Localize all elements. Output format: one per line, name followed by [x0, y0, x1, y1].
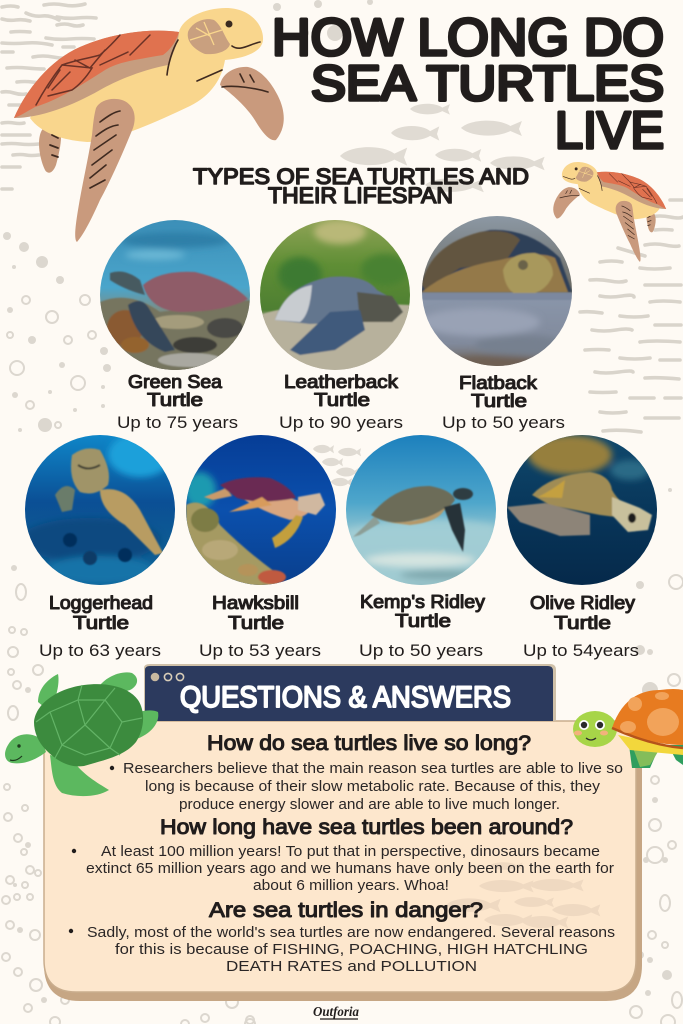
- header tab: [145, 666, 553, 721]
- question 3 heading: Are sea turtles in danger?: [209, 899, 483, 922]
- title: HOW LONG DO: [272, 9, 664, 67]
- name: loggerhead turtle: Loggerhead: [49, 593, 153, 613]
- icon: cartoon turtle: [573, 689, 683, 768]
- name: olive ridley turtle: Turtle: [554, 613, 611, 633]
- name: kemp's ridley turtle: [360, 592, 485, 631]
- card: leatherback turtle: [260, 220, 410, 432]
- answer 1: Researchers believe that the main reason sea turtles are able to live so: [123, 760, 623, 777]
- lifespan: 63 years: Up to 63 years: [39, 641, 161, 660]
- name: green sea turtle: Green Sea: [128, 372, 223, 392]
- panel body: [44, 721, 636, 992]
- photo: kemp's ridley turtle: [346, 435, 496, 585]
- name: hawksbill turtle: Hawksbill: [212, 593, 299, 613]
- answer 3: for this is because of FISHING, POACHING, HIGH HATCHLING: [115, 941, 588, 958]
- card: green sea turtle: [95, 220, 255, 432]
- photo: hawksbill turtle: [184, 435, 336, 590]
- lifespan: 54 years: Up to 54years: [523, 641, 639, 660]
- name: flatback turtle: [459, 373, 538, 411]
- answer 2: about 6 million years. Whoa!: [253, 877, 449, 894]
- icon: green turtle: [5, 672, 158, 796]
- name: hawksbill turtle: [212, 593, 299, 633]
- name: flatback turtle: Turtle: [471, 391, 527, 411]
- name: green sea turtle: Turtle: [147, 390, 203, 410]
- name: loggerhead turtle: Turtle: [73, 613, 129, 633]
- answer 1: produce energy slower and are able to live much longer.: [179, 796, 560, 813]
- large illustrated sea turtle: [14, 8, 284, 242]
- name: olive ridley turtle: [530, 593, 635, 633]
- title: LIVE: [555, 102, 664, 160]
- title: [272, 9, 664, 160]
- lifespan: 50 years: Up to 50 years: [442, 413, 565, 432]
- answer 3: [69, 924, 615, 975]
- name: leatherback turtle: Turtle: [314, 390, 370, 410]
- answer 1: long is because of their slow metabolic rate. Because of this, they: [145, 778, 601, 795]
- answer 2: extinct 65 million years ago and we humans have only been on the earth for: [86, 860, 614, 877]
- photo: flatback turtle: [420, 216, 572, 370]
- name: hawksbill turtle: Turtle: [228, 613, 284, 633]
- question 1 heading: How do sea turtles live so long?: [207, 732, 531, 755]
- header tab shadow: [144, 664, 556, 721]
- lifespan: 75 years: Up to 75 years: [117, 413, 238, 432]
- lifespan: 53 years: Up to 53 years: [199, 641, 321, 660]
- card: loggerhead turtle: [20, 433, 175, 660]
- name: kemp's ridley turtle: Turtle: [395, 611, 451, 631]
- name: green sea turtle: [128, 372, 223, 410]
- panel shadow: [44, 730, 642, 1001]
- window dots: [151, 673, 184, 681]
- card: kemp's ridley turtle: [346, 435, 496, 660]
- answer 3: DEATH RATES and POLLUTION: [226, 958, 477, 975]
- card: olive ridley turtle: [507, 435, 657, 660]
- name: loggerhead turtle: [49, 593, 153, 633]
- name: leatherback turtle: [284, 372, 399, 410]
- lifespan: 50 years: Up to 50 years: [359, 641, 483, 660]
- photo: olive ridley turtle: [507, 435, 657, 585]
- name: flatback turtle: Flatback: [459, 373, 538, 393]
- answer 2: At least 100 million years! To put that in perspective, dinosaurs became: [101, 843, 600, 860]
- question 2 heading: How long have sea turtles been around?: [160, 816, 573, 839]
- panel fish: [446, 862, 600, 928]
- card: flatback turtle: [420, 216, 572, 432]
- photo: loggerhead turtle: [20, 433, 175, 585]
- card: hawksbill turtle: [184, 435, 336, 660]
- subtitle: TYPES OF SEA TURTLES AND: [193, 164, 529, 189]
- small illustrated sea turtle: [553, 162, 666, 262]
- name: olive ridley turtle: Olive Ridley: [530, 593, 635, 613]
- subtitle: THEIR LIFESPAN: [268, 183, 453, 208]
- fish school background: [313, 104, 545, 486]
- answer 3: Sadly, most of the world's sea turtles are now endangered. Several reasons: [87, 924, 615, 941]
- title: SEA TURTLES: [311, 57, 664, 111]
- answer 1: [110, 760, 623, 813]
- photo: leatherback turtle: [260, 220, 410, 370]
- photo: green sea turtle: [95, 220, 255, 375]
- lifespan: 90 years: Up to 90 years: [279, 413, 403, 432]
- subtitle: [193, 164, 529, 208]
- answer 2: [72, 843, 614, 894]
- name: kemp's ridley turtle: Kemp's Ridley: [360, 592, 485, 612]
- outforia logo: Outforia: [313, 1005, 359, 1020]
- header text: QUESTIONS & ANSWERS: [180, 681, 511, 714]
- questions and answers panel: [44, 664, 642, 1001]
- name: leatherback turtle: Leatherback: [284, 372, 399, 392]
